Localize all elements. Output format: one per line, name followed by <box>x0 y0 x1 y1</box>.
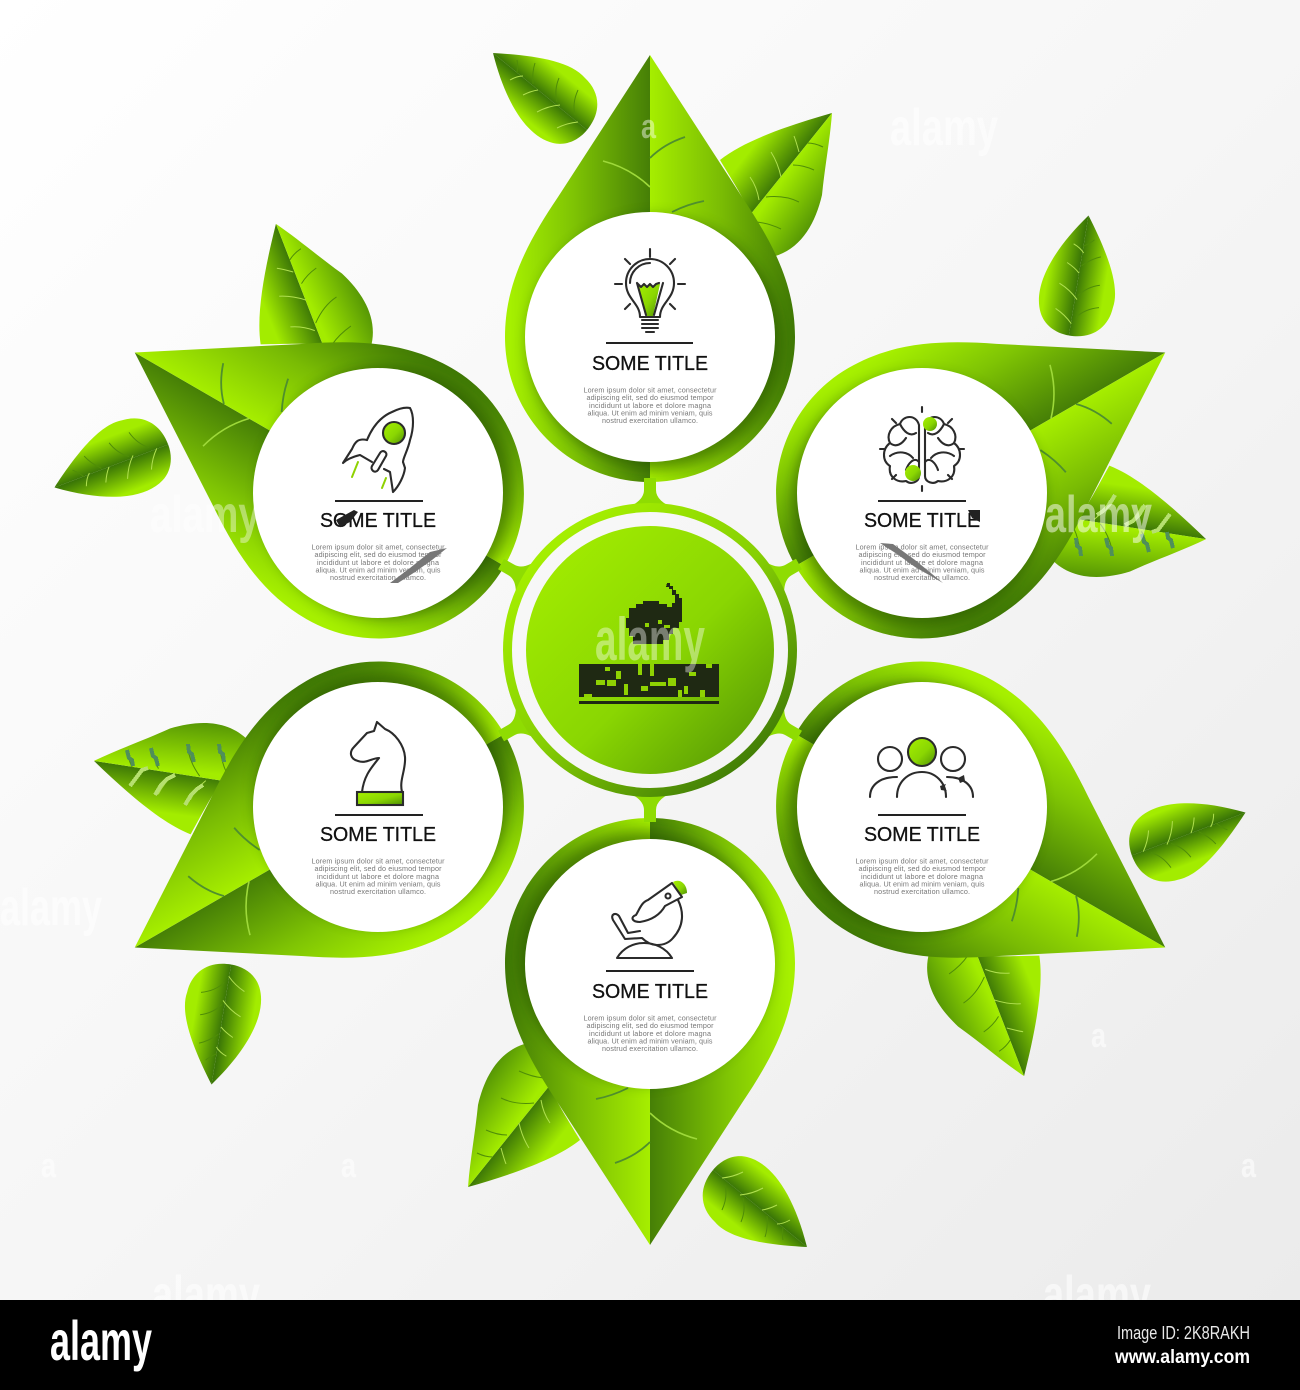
leaf drop: bottom <box>505 790 795 1245</box>
divider <box>878 500 966 502</box>
title: SOME TITLE <box>320 509 436 532</box>
divider <box>335 500 423 502</box>
body text: incididunt ut labore et dolore magna <box>589 1029 711 1038</box>
body text: nostrud exercitation ullamco. <box>602 1044 698 1053</box>
body text: adipiscing elit, sed do eiusmod tempor <box>858 550 986 559</box>
body text: adipiscing elit, sed do eiusmod tempor <box>314 864 442 873</box>
body text: adipiscing elit, sed do eiusmod tempor <box>858 864 986 873</box>
smudge <box>880 543 943 583</box>
body text: Lorem ipsum dolor sit amet, consectetur <box>584 386 717 394</box>
leaves: upper right pair <box>912 216 1258 611</box>
central circle <box>526 526 774 774</box>
leaves: top pair <box>493 53 832 257</box>
body text: Lorem ipsum dolor sit amet, consectetur <box>312 856 445 866</box>
background watermarks: alamy <box>152 1266 260 1324</box>
white circle: upper left <box>253 368 503 618</box>
watermarks over leaves: alamy <box>1045 486 1152 544</box>
body text: adipiscing elit, sed do eiusmod tempor <box>586 393 714 402</box>
background watermarks: a <box>1241 1147 1257 1185</box>
body text <box>856 542 989 582</box>
panel: upper right brain <box>856 407 989 583</box>
body text: nostrud exercitation ullamco. <box>874 573 970 582</box>
title: SOME TITLE <box>864 823 980 846</box>
leaf drop: top <box>505 55 795 510</box>
white circle: upper right <box>797 368 1047 618</box>
leaves: bottom pair <box>468 1043 807 1247</box>
icon: team <box>870 738 973 797</box>
icon: brain <box>880 407 964 491</box>
body text: aliqua. Ut enim ad minim veniam, quis <box>588 1036 713 1046</box>
body text: incididunt ut labore et dolore magna <box>317 558 439 567</box>
white circle: bottom <box>525 839 775 1089</box>
pixelated leaf artefacts <box>127 495 1173 805</box>
central pixel icon <box>579 583 719 704</box>
panel: upper left rocket <box>312 408 447 583</box>
leaves: lower right pair <box>899 711 1246 1106</box>
panel: lower left chess <box>312 722 445 896</box>
smudge on title <box>336 510 358 527</box>
body text: incididunt ut labore et dolore magna <box>861 872 983 881</box>
icon: rocket <box>343 408 413 492</box>
body text <box>312 542 445 582</box>
footer bar <box>0 1300 1300 1390</box>
body text: Lorem ipsum dolor sit amet, consectetur <box>856 856 989 866</box>
leaves: lower left pair <box>42 689 388 1084</box>
leaf drop: upper right <box>699 227 1238 706</box>
website: www.alamy.com <box>1114 1347 1250 1368</box>
title: SOME TITLE <box>320 823 436 846</box>
body text: aliqua. Ut enim ad minim veniam, quis <box>316 566 441 574</box>
divider <box>606 342 693 344</box>
body text: aliqua. Ut enim ad minim veniam, quis <box>860 566 985 574</box>
white circle: top <box>525 212 775 462</box>
body text: Lorem ipsum dolor sit amet, consectetur <box>312 542 445 552</box>
body text: nostrud exercitation ullamco. <box>330 887 426 896</box>
title: SOME TITLE <box>864 509 980 532</box>
divider <box>335 814 423 816</box>
center watermark: alamy <box>595 606 705 673</box>
watermarks over leaves: a <box>641 108 657 146</box>
icon: microscope <box>612 881 687 958</box>
body text: incididunt ut labore et dolore magna <box>589 401 711 410</box>
title: SOME TITLE <box>592 352 708 375</box>
background watermarks: a <box>341 1147 357 1185</box>
body text <box>312 856 445 896</box>
background watermarks: alamy <box>0 879 102 937</box>
body text: aliqua. Ut enim ad minim veniam, quis <box>316 880 441 888</box>
body text: incididunt ut labore et dolore magna <box>317 872 439 881</box>
body text: Lorem ipsum dolor sit amet, consectetur <box>584 1014 717 1022</box>
title: SOME TITLE <box>592 980 708 1003</box>
leaf drop: upper left <box>62 227 601 706</box>
footer logo: alamy <box>50 1309 152 1372</box>
body text: adipiscing elit, sed do eiusmod tempor <box>314 550 442 559</box>
body text <box>584 386 717 425</box>
body text: nostrud exercitation ullamco. <box>602 416 698 425</box>
body text: nostrud exercitation ullamco. <box>330 573 426 582</box>
divider <box>606 970 694 972</box>
body text <box>856 856 989 896</box>
body text: adipiscing elit, sed do eiusmod tempor <box>586 1021 714 1030</box>
watermarks over leaves <box>150 108 1152 544</box>
background watermarks: a <box>41 1147 57 1185</box>
image id: Image ID: 2K8RAKH <box>1117 1323 1250 1343</box>
icon: chess knight <box>351 722 405 805</box>
leaf drop: lower left <box>62 594 601 1073</box>
body text: incididunt ut labore et dolore magna <box>861 558 983 567</box>
background watermarks: alamy <box>890 99 998 157</box>
body text <box>584 1014 717 1053</box>
panel: top idea <box>584 249 717 425</box>
central ring <box>508 508 792 792</box>
background watermarks: alamy <box>1043 1266 1151 1324</box>
white circle: lower left <box>253 682 503 932</box>
leaf drop: lower right <box>699 594 1238 1073</box>
smudge on title <box>968 510 980 522</box>
icon: light bulb <box>615 249 685 332</box>
divider <box>878 814 966 816</box>
panel: lower right team <box>856 738 989 896</box>
body text: aliqua. Ut enim ad minim veniam, quis <box>588 408 713 418</box>
leaves: upper left pair <box>54 194 401 589</box>
body text: aliqua. Ut enim ad minim veniam, quis <box>860 880 985 888</box>
body text: nostrud exercitation ullamco. <box>874 887 970 896</box>
background watermarks: a <box>1091 1017 1107 1055</box>
watermarks over leaves: alamy <box>150 486 260 544</box>
panel: bottom microscope <box>584 881 717 1053</box>
white circle: lower right <box>797 682 1047 932</box>
smudge <box>390 548 447 583</box>
body text: Lorem ipsum dolor sit amet, consectetur <box>856 542 989 552</box>
